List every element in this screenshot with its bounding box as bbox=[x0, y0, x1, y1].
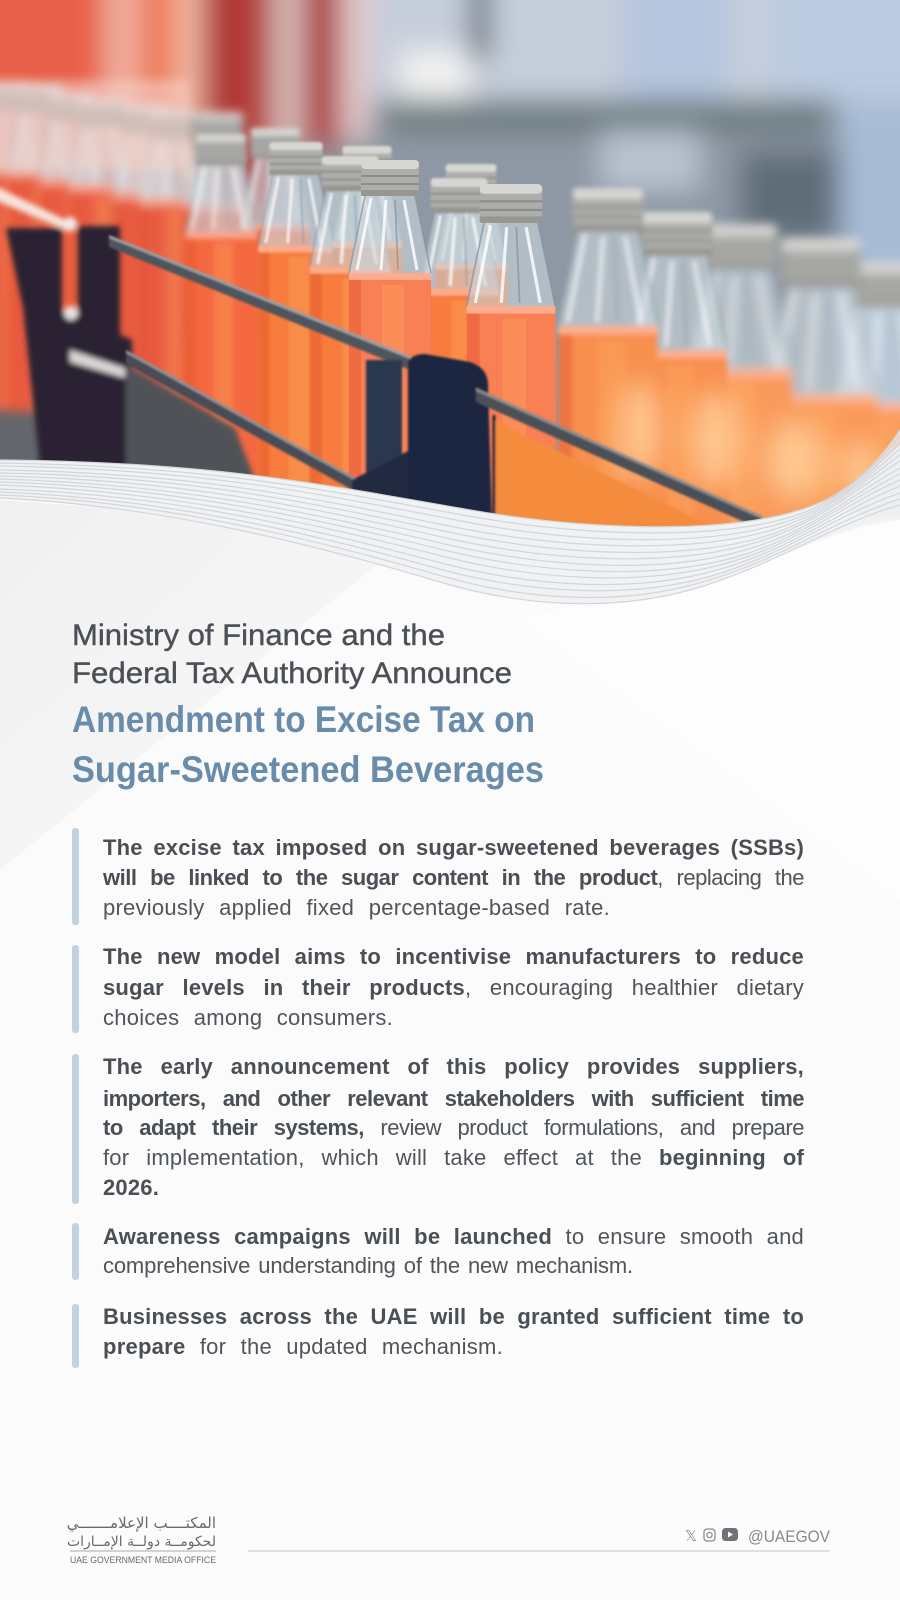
heading: amendment line 1: Amendment to Excise Tax on bbox=[72, 699, 535, 740]
icon: X: 𝕏 bbox=[685, 1527, 697, 1545]
text block: new model bbox=[72, 944, 804, 1033]
text block: linked to sugar content: will be linked to the sugar content in the product, replacing the bbox=[103, 865, 804, 890]
icon: instagram bbox=[704, 1529, 715, 1541]
footer: arabic and english logo bbox=[67, 1514, 216, 1566]
footer: handle: @UAEGOV bbox=[748, 1527, 831, 1546]
footer: arabic and english logo: لحكومــة دولــة الإمــارات bbox=[67, 1534, 216, 1550]
text block: early announcement: The early announcement of this policy provides suppliers, bbox=[103, 1054, 804, 1079]
heading: amendment line 2: Sugar-Sweetened Beverages bbox=[72, 749, 544, 790]
text block: early announcement bbox=[72, 1054, 804, 1204]
text block: early announcement: 2026. bbox=[103, 1175, 159, 1200]
heading: ministry line 2: Federal Tax Authority Announce bbox=[72, 657, 512, 690]
text block: linked to sugar content bbox=[72, 828, 804, 925]
text block: new model: sugar levels in their products, encouraging healthier dietary bbox=[103, 975, 804, 1000]
text block: early announcement: for implementation, which will take effect at the beginning of bbox=[103, 1145, 804, 1170]
text block: linked to sugar content: previously applied fixed percentage-based rate. bbox=[103, 895, 610, 920]
text block: businesses: Businesses across the UAE will be granted sufficient time to bbox=[103, 1304, 804, 1329]
soft highlights in right-hand liquid bbox=[618, 380, 880, 500]
footer: divider line bbox=[248, 1550, 830, 1552]
text block: new model: choices among consumers. bbox=[103, 1005, 393, 1030]
heading: ministry line 1: Ministry of Finance and the bbox=[72, 619, 445, 652]
conveyor rails and posts bbox=[0, 186, 762, 535]
photo: bottling line with orange drinks bbox=[0, 0, 900, 818]
text block: new model: The new model aims to incentivise manufacturers to reduce bbox=[103, 944, 804, 969]
text block: businesses bbox=[72, 1304, 804, 1368]
far-left blurred bottles bbox=[0, 80, 254, 456]
wave band with fine lines bbox=[0, 430, 900, 604]
photo background: blurred factory bbox=[0, 0, 900, 570]
mid-ground bottles bbox=[184, 128, 311, 499]
text block: awareness campaigns: comprehensive understanding of the new mechanism. bbox=[103, 1253, 633, 1278]
icon: youtube bbox=[722, 1528, 738, 1541]
text block: early announcement: importers, and other relevant stakeholders with sufficient time bbox=[103, 1086, 804, 1111]
text block: awareness campaigns bbox=[72, 1223, 804, 1280]
text block: early announcement: to adapt their systems, review product formulations, and prepare bbox=[103, 1115, 804, 1140]
front bottles in focus bbox=[348, 160, 556, 638]
footer: arabic and english logo: UAE GOVERNMENT MEDIA OFFICE bbox=[70, 1555, 216, 1566]
text block: businesses: prepare for the updated mechanism. bbox=[103, 1334, 503, 1359]
right-hand blurred bottles bbox=[686, 224, 900, 818]
text block: linked to sugar content: The excise tax imposed on sugar-sweetened beverages (SSBs) bbox=[103, 835, 804, 860]
text block: awareness campaigns: Awareness campaigns will be launched to ensure smooth and bbox=[103, 1224, 804, 1249]
background facets bbox=[0, 460, 900, 1600]
footer: arabic and english logo: المكتــــب الإعلامـــــــي bbox=[67, 1514, 216, 1533]
